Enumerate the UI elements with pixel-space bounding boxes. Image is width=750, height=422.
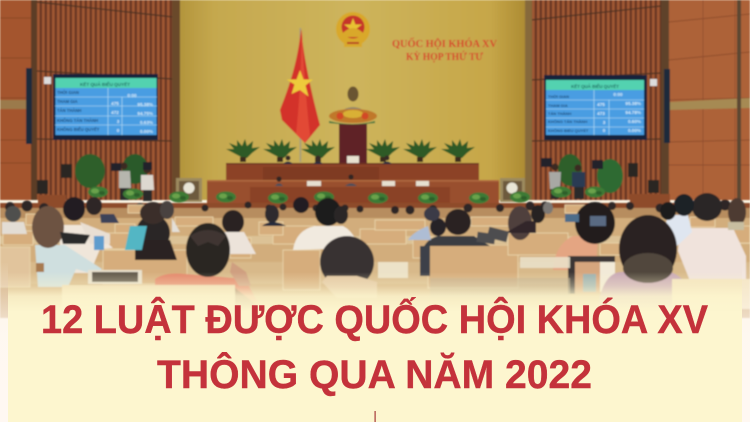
- left vote screen: 3: [117, 119, 120, 124]
- right vote screen: 95.38%: [625, 101, 641, 106]
- right vote screen: [544, 75, 647, 140]
- delegates right: [420, 236, 490, 260]
- left vote screen: THAM GIA: [57, 99, 78, 104]
- national flag: [280, 28, 320, 162]
- left vote screen: KHÔNG TÁN THÀNH: [57, 118, 98, 123]
- secretary stands: [176, 178, 525, 202]
- left wooden wall: [0, 0, 37, 200]
- right wooden wall: [669, 0, 750, 200]
- right vote screen: KHÔNG TÁN THÀNH: [548, 119, 587, 124]
- delegate seating area: [0, 193, 750, 318]
- delegates left: [60, 225, 113, 273]
- left vote screen: 475: [111, 101, 119, 106]
- left vote screen: 95.38%: [137, 102, 153, 107]
- Ho Chi Minh bust and podium: [329, 86, 377, 164]
- presidium tiers: [207, 156, 499, 203]
- left vote screen: 0.63%: [140, 120, 153, 125]
- wall cameras: [44, 77, 657, 86]
- right vote screen: 473: [597, 111, 605, 116]
- right vote screen: 0: [603, 128, 606, 133]
- plants behind the presidium: [226, 139, 475, 162]
- right vote screen: 475: [597, 102, 605, 107]
- national emblem: [336, 12, 370, 47]
- wall inscription: QUỐC HỘI KHÓA XV: [392, 37, 497, 50]
- left vote screen: 0.00%: [140, 129, 153, 134]
- wall inscription: [392, 37, 497, 63]
- title: 12 LUẬT ĐƯỢC QUỐC HỘI KHÓA XV: [41, 296, 708, 342]
- left vote screen: THỜI GIAN: [57, 90, 79, 95]
- left vote screen: 94.75%: [137, 111, 153, 116]
- left vote screen: [53, 74, 158, 140]
- title: THÔNG QUA NĂM 2022: [157, 351, 592, 397]
- speaker columns: [26, 68, 32, 144]
- golden central wall: [180, 0, 525, 200]
- right vote screen: 94.78%: [625, 110, 641, 115]
- wall inscription: KỲ HỌP THỨ TƯ: [406, 51, 484, 63]
- seat backs: [0, 205, 750, 290]
- right slatted wall: [531, 0, 661, 200]
- right vote screen: THAM GIA: [548, 103, 568, 108]
- right vote screen: 0.60%: [628, 119, 641, 124]
- camera crews and shrubs: [37, 154, 659, 201]
- right vote screen: THỜI GIAN: [548, 94, 569, 99]
- right vote screen: 0.00%: [628, 128, 641, 133]
- floor rail and small plants: [0, 192, 750, 211]
- right vote screen: KHÔNG BIỂU QUYẾT: [548, 128, 589, 133]
- timeline start marker: [374, 411, 376, 422]
- right vote screen: KẾT QUẢ BIỂU QUYẾT: [571, 84, 619, 89]
- right vote screen: TÁN THÀNH: [548, 111, 571, 116]
- right vote screen: 0:00: [613, 92, 623, 97]
- left slatted wall: [37, 0, 173, 200]
- left vote screen: 0:00: [127, 93, 137, 98]
- row of far heads: [5, 198, 744, 214]
- conference hall photo: [0, 0, 750, 318]
- left vote screen: KHÔNG BIỂU QUYẾT: [57, 127, 100, 132]
- left vote screen: KẾT QUẢ BIỂU QUYẾT: [80, 81, 130, 87]
- left vote screen: 0: [117, 128, 120, 133]
- left vote screen: TÁN THÀNH: [57, 108, 81, 113]
- cream title panel: [0, 262, 750, 422]
- right vote screen: 3: [603, 120, 606, 125]
- title: [41, 296, 708, 397]
- left vote screen: 472: [111, 110, 119, 115]
